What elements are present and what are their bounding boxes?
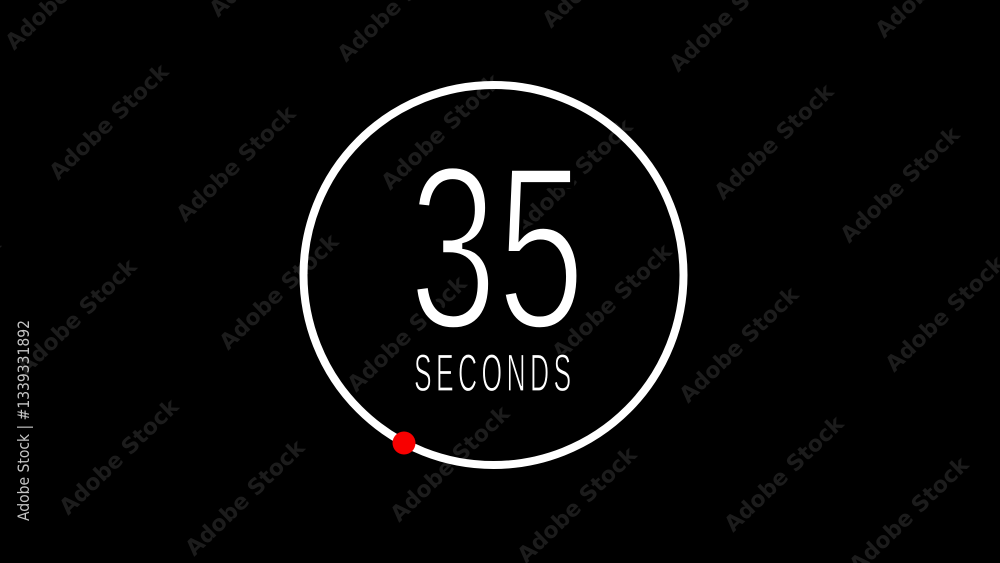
watermark pattern: Adobe Stock bbox=[215, 228, 345, 355]
watermark pattern: Adobe Stock bbox=[45, 58, 175, 185]
watermark pattern: Adobe Stock bbox=[13, 253, 143, 380]
watermark pattern: Adobe Stock bbox=[710, 78, 840, 205]
watermark pattern: Adobe Stock bbox=[377, 68, 507, 195]
watermark pattern: Adobe Stock bbox=[509, 113, 639, 240]
watermark pattern: Adobe Stock bbox=[181, 434, 311, 561]
watermark pattern: Adobe Stock bbox=[386, 400, 516, 527]
number 35: 3 bbox=[409, 119, 497, 378]
watermark pattern: Adobe Stock bbox=[720, 410, 850, 537]
watermark pattern: Adobe Stock bbox=[55, 393, 185, 520]
watermark pattern: Adobe Stock bbox=[343, 270, 473, 397]
watermark pattern: Adobe Stock bbox=[548, 238, 678, 365]
watermark pattern: Adobe Stock bbox=[675, 281, 805, 408]
number 35 bbox=[409, 119, 585, 378]
watermark pattern: Adobe Stock bbox=[836, 121, 966, 248]
countdown ring bbox=[304, 85, 684, 465]
stock id text: Adobe Stock | #1339331892 bbox=[14, 320, 33, 521]
label: seconds: SECONDS bbox=[414, 343, 575, 402]
watermark pattern: Adobe Stock bbox=[172, 100, 302, 227]
number 35: 5 bbox=[497, 119, 585, 378]
progress dot bbox=[392, 432, 416, 454]
